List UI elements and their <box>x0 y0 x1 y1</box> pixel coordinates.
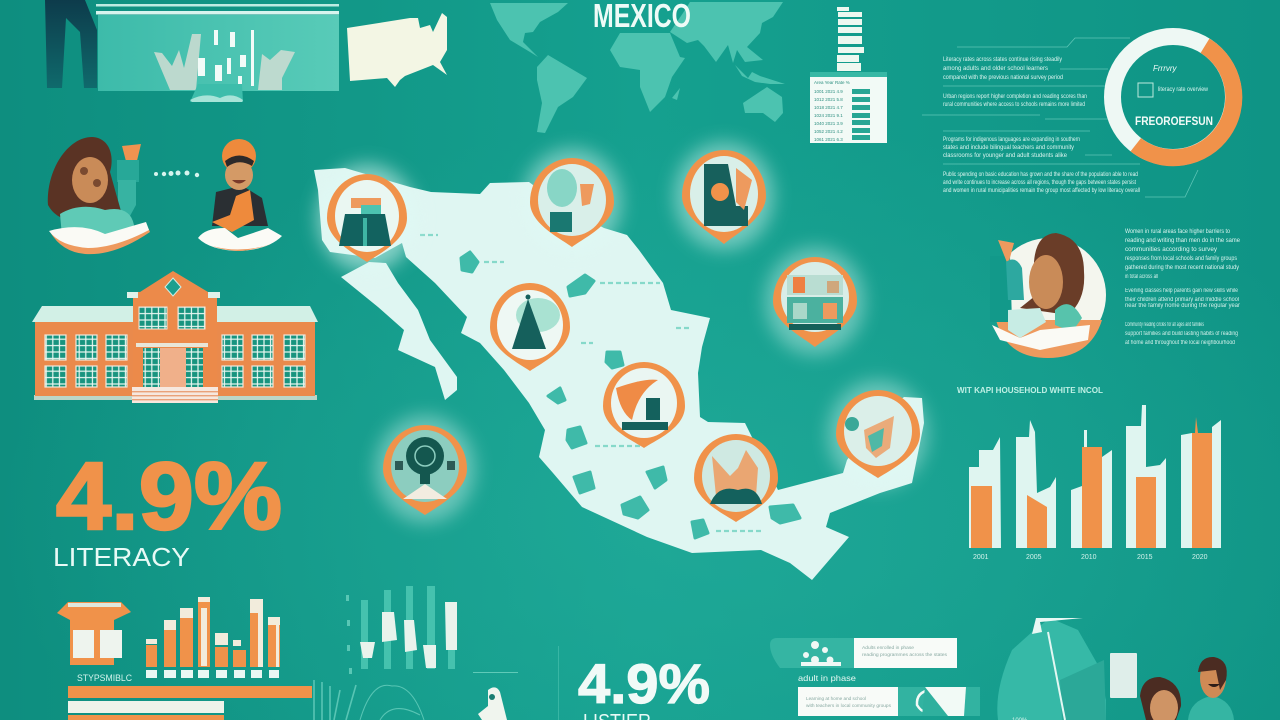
panel: bottom right figures <box>997 618 1234 720</box>
text block <box>1125 228 1240 346</box>
pin 7: flames and mound <box>694 434 778 522</box>
year labels: 2010 <box>1081 554 1097 561</box>
card 2: with teachers in local community groups <box>806 703 892 708</box>
tablet <box>1110 653 1137 698</box>
shoulder <box>1055 304 1082 332</box>
text block: notes: Public spending on basic education has grown and the share of the population able to read <box>943 171 1138 178</box>
text block: communities according to survey <box>1125 246 1218 253</box>
woman <box>1140 677 1181 720</box>
donut center content: Frrrvry <box>1153 64 1178 73</box>
mainland <box>314 168 924 580</box>
stat: 4.9% literacy <box>53 443 282 572</box>
blue figure <box>1006 260 1024 300</box>
pin 6: sail and monument <box>603 362 685 448</box>
text block: gathered during the most recent national study <box>1125 264 1240 271</box>
donut chart <box>1112 36 1234 158</box>
white bars <box>969 405 1221 548</box>
panel: reading woman portrait <box>990 228 1240 358</box>
text block: notes: and write continues to increase across all regions, though the gaps between states persist <box>943 179 1136 186</box>
text block: Evening classes help parents gain new skills while <box>1125 288 1239 294</box>
text block: notes: classrooms for younger and adult students alike <box>943 152 1067 159</box>
label: LITERACY <box>53 542 190 572</box>
panel: data table: 1040 2021 3.9 <box>814 121 843 126</box>
icon <box>616 380 668 430</box>
jacket <box>212 188 268 226</box>
man <box>1188 657 1234 720</box>
orange bars <box>971 417 1212 548</box>
chart: teal columns with white figures <box>346 586 457 674</box>
icon: raised card <box>122 144 141 165</box>
screen panel <box>98 15 339 91</box>
card 1: reading programmes across the states <box>862 652 948 657</box>
donut center content: FREOROEFSUN <box>1135 114 1213 128</box>
chart title: WIT KAPI HOUSEHOLD WHITE INCOL <box>957 385 1103 395</box>
column chart <box>146 597 280 678</box>
text block: notes: compared with the previous national survey period <box>943 74 1063 81</box>
map: Mexico <box>314 168 924 580</box>
text block: notes <box>943 56 1140 194</box>
text block: notes: Urban regions report higher completion and reading scores than <box>943 93 1087 100</box>
icon: face <box>72 157 108 203</box>
icon <box>339 198 391 246</box>
divider line <box>558 646 559 720</box>
icon: portrait circle <box>992 238 1106 352</box>
year labels <box>973 554 1208 561</box>
panel: left woman with book <box>48 137 150 254</box>
panel: data table: 1001 2021 4.9 <box>814 89 843 94</box>
text block: notes: Programs for indigenous languages are expanding in southern <box>943 136 1080 143</box>
panel: data table: 1024 2021 9.1 <box>814 113 843 118</box>
donut center content: literacy rate overview <box>1158 87 1209 93</box>
stat: 4.9% bottom <box>578 652 710 720</box>
scarf <box>212 190 254 232</box>
bar chart: literacy by year <box>957 385 1221 561</box>
year labels: 2005 <box>1026 554 1042 561</box>
side windows <box>45 335 305 387</box>
icon: small building <box>57 602 131 665</box>
icon: raised hands <box>154 34 295 90</box>
card 1 <box>770 638 957 668</box>
text block: reading and writing than men do in the same <box>1125 237 1240 244</box>
year labels: 2015 <box>1137 554 1153 561</box>
orange triangle <box>998 240 1014 265</box>
icon <box>845 416 894 458</box>
text block: notes: and women in rural municipalities remain the group most affected by low literacy overall <box>943 187 1140 194</box>
icon <box>395 437 455 499</box>
panel: data table: Area Year Rate % <box>814 80 850 85</box>
hatch top <box>1032 618 1083 634</box>
icon: hair <box>48 137 122 220</box>
cushion <box>198 228 282 251</box>
base <box>34 395 317 400</box>
text block: Women in rural areas face higher barriers to <box>1125 228 1230 235</box>
world map <box>490 2 785 133</box>
text block: their children attend primary and middle school <box>1125 297 1239 303</box>
card 2: Learning at home and school <box>806 696 866 701</box>
panel: bottom left school and columns <box>57 597 312 720</box>
book <box>1008 308 1046 338</box>
icon: school building <box>32 271 318 403</box>
panel: seated boy with book <box>198 139 282 251</box>
text block: in total across all <box>1125 274 1158 280</box>
pin 3: machine and figure <box>674 142 774 250</box>
icon <box>787 275 843 330</box>
card caption: adult in phase <box>798 673 856 683</box>
panel: data table: 1012 2021 5.8 <box>814 97 843 102</box>
text block: at home and throughout the local neighbourhood <box>1125 340 1235 346</box>
connector lines <box>922 38 1198 197</box>
panel: data table: 1018 2021 4.7 <box>814 105 843 110</box>
pin 2: lightbulb <box>522 148 622 256</box>
pin 5: tent <box>490 283 570 371</box>
number: 4.9% <box>578 652 710 715</box>
table <box>810 72 887 143</box>
pin 9: head with gear <box>375 415 475 523</box>
text block: notes: among adults and older school learners <box>943 65 1049 72</box>
card 1: Adults enrolled in phase <box>862 645 915 650</box>
text block: notes: states and include bilingual teachers and community <box>943 144 1075 151</box>
hair <box>1020 233 1084 315</box>
center block <box>127 271 220 396</box>
wings <box>35 322 315 396</box>
text block: notes: Literacy rates across states continue rising steadily <box>943 56 1063 63</box>
panel: data table: 1052 2021 4.2 <box>814 129 843 134</box>
face <box>225 160 253 190</box>
porch and door <box>136 343 208 347</box>
icon <box>547 169 594 232</box>
panel: donut chart with notes <box>922 36 1234 197</box>
label: STYPSMIBLC <box>77 673 132 683</box>
cushion <box>50 223 150 254</box>
left background cut <box>990 256 1012 322</box>
pin 4: shelves grid <box>765 247 865 355</box>
donut center content <box>1135 64 1213 128</box>
horizontal bars <box>68 686 312 720</box>
face <box>1029 255 1063 309</box>
upper windows <box>139 307 167 329</box>
icon: USA map <box>347 13 447 87</box>
text block: near the family home during the regular year <box>1125 303 1240 309</box>
pin 8: abstract figure <box>828 380 928 488</box>
icon: orange hat <box>222 139 256 173</box>
panel: data table: 1061 2021 6.3 <box>814 137 843 142</box>
pin 1: fabric and stack <box>317 164 417 272</box>
text block: notes: rural communities where access to schools remains more limited <box>943 101 1085 108</box>
steps <box>132 387 218 403</box>
icon <box>512 294 560 349</box>
year labels: 2001 <box>973 554 989 561</box>
text block: Community reading circles for all ages and families <box>1125 322 1204 328</box>
white line <box>1048 632 1065 720</box>
Baja California <box>341 262 457 400</box>
icon: small seated figure <box>473 672 518 720</box>
year labels: 2020 <box>1192 554 1208 561</box>
state clusters <box>461 252 800 538</box>
narrow list column <box>837 7 864 71</box>
line sketches <box>314 680 424 720</box>
card 2 <box>798 687 980 716</box>
body <box>60 207 134 236</box>
dots between figures <box>154 170 199 177</box>
panel: data table <box>810 7 887 143</box>
text block: responses from local schools and family groups <box>1125 255 1238 262</box>
panel: top left classroom scene <box>45 0 339 102</box>
panel: stat cards <box>770 638 980 716</box>
icon <box>704 164 752 226</box>
icon <box>710 450 762 504</box>
icon: standing figure legs <box>45 0 97 88</box>
number: 4.9% <box>56 443 282 550</box>
icon: teal shape <box>997 618 1106 720</box>
text block: support families and build lasting habits of reading <box>1125 331 1238 337</box>
rosette <box>165 278 181 296</box>
